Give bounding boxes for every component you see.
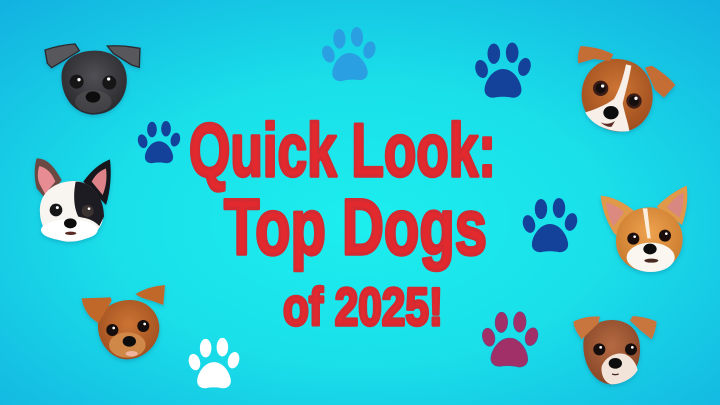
dog: black and white terrier [35, 158, 111, 242]
title: Quick Look: Quick Look: [189, 108, 496, 192]
icon: small navy paw [136, 121, 182, 163]
dog: brown puppy bottom right [573, 316, 657, 384]
icon: light blue paw [319, 26, 379, 82]
icon: magenta paw [479, 310, 541, 368]
dog: brown puppy bottom left [82, 285, 165, 359]
icon: white paw [187, 338, 241, 388]
dog: black puppy [45, 44, 140, 115]
icon: navy paw right [521, 198, 579, 252]
dog: orange corgi [601, 186, 687, 272]
icon: navy paw top [473, 42, 533, 98]
title: Top Dogs: Top Dogs [224, 182, 487, 271]
title: of 2025: of 2025! [283, 278, 443, 337]
dog: brown and white puppy top right [578, 46, 675, 132]
